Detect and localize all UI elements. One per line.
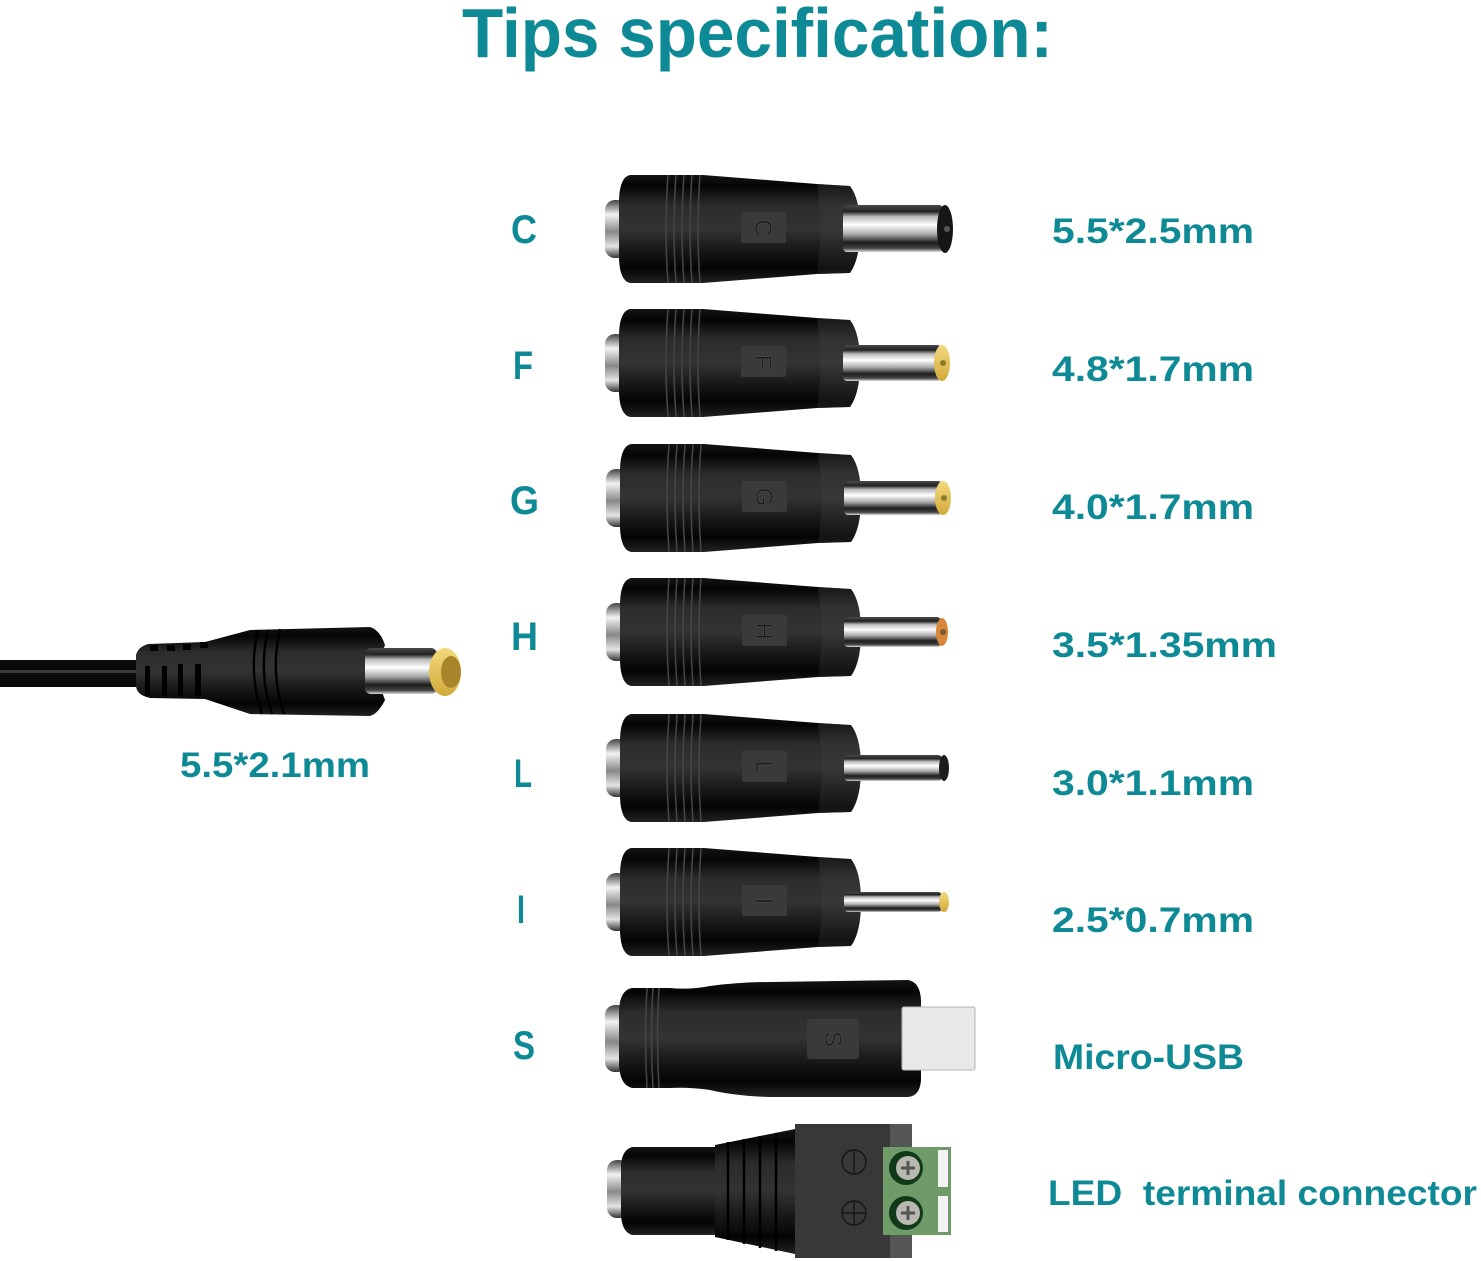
label I: I [517, 888, 525, 932]
label S: S [513, 1024, 535, 1068]
label C: C [511, 208, 537, 252]
tip L [606, 714, 949, 822]
tip G: G [750, 488, 777, 506]
label G: G [510, 479, 539, 523]
tip I: I [750, 898, 777, 904]
connector pin [365, 648, 437, 694]
tip S: micro-USB adapter: S [819, 1031, 846, 1047]
polarity marks [842, 1150, 866, 1225]
LED terminal connector label: LED terminal connector [1048, 1174, 1477, 1213]
cable [0, 660, 140, 687]
size G: 4.0*1.7mm [1052, 488, 1254, 527]
S badge [807, 1019, 859, 1059]
barrel [621, 1147, 715, 1235]
size L: 3.0*1.1mm [1052, 764, 1254, 803]
label L: L [514, 752, 532, 796]
USB plug [902, 1007, 975, 1070]
main connector with cable [0, 627, 461, 716]
size I: 2.5*0.7mm [1052, 901, 1254, 940]
tip F [605, 309, 950, 417]
tip C [605, 175, 953, 283]
yellow tip [429, 648, 461, 696]
adapter body [619, 980, 921, 1097]
screws [889, 1151, 923, 1185]
size F: 4.8*1.7mm [1052, 350, 1254, 389]
label H: H [511, 615, 538, 659]
size C: 5.5*2.5mm [1052, 212, 1254, 251]
label F: F [513, 344, 533, 388]
green terminal [883, 1147, 951, 1235]
terminal block [795, 1124, 912, 1258]
connector body [136, 627, 385, 716]
tip C: C [749, 219, 776, 237]
LED terminal connector [607, 1124, 951, 1258]
size S: Micro-USB [1053, 1038, 1244, 1077]
tip G [606, 444, 951, 552]
size H: 3.5*1.35mm [1052, 626, 1277, 665]
tip L: L [750, 760, 777, 774]
tip H: H [750, 622, 777, 640]
tip F: F [749, 355, 776, 369]
tip H [606, 578, 948, 686]
main connector size: 5.5*2.1mm [180, 746, 370, 785]
ribbed taper [715, 1129, 795, 1254]
tip S: micro-USB adapter [605, 980, 975, 1097]
tip I [606, 848, 949, 956]
